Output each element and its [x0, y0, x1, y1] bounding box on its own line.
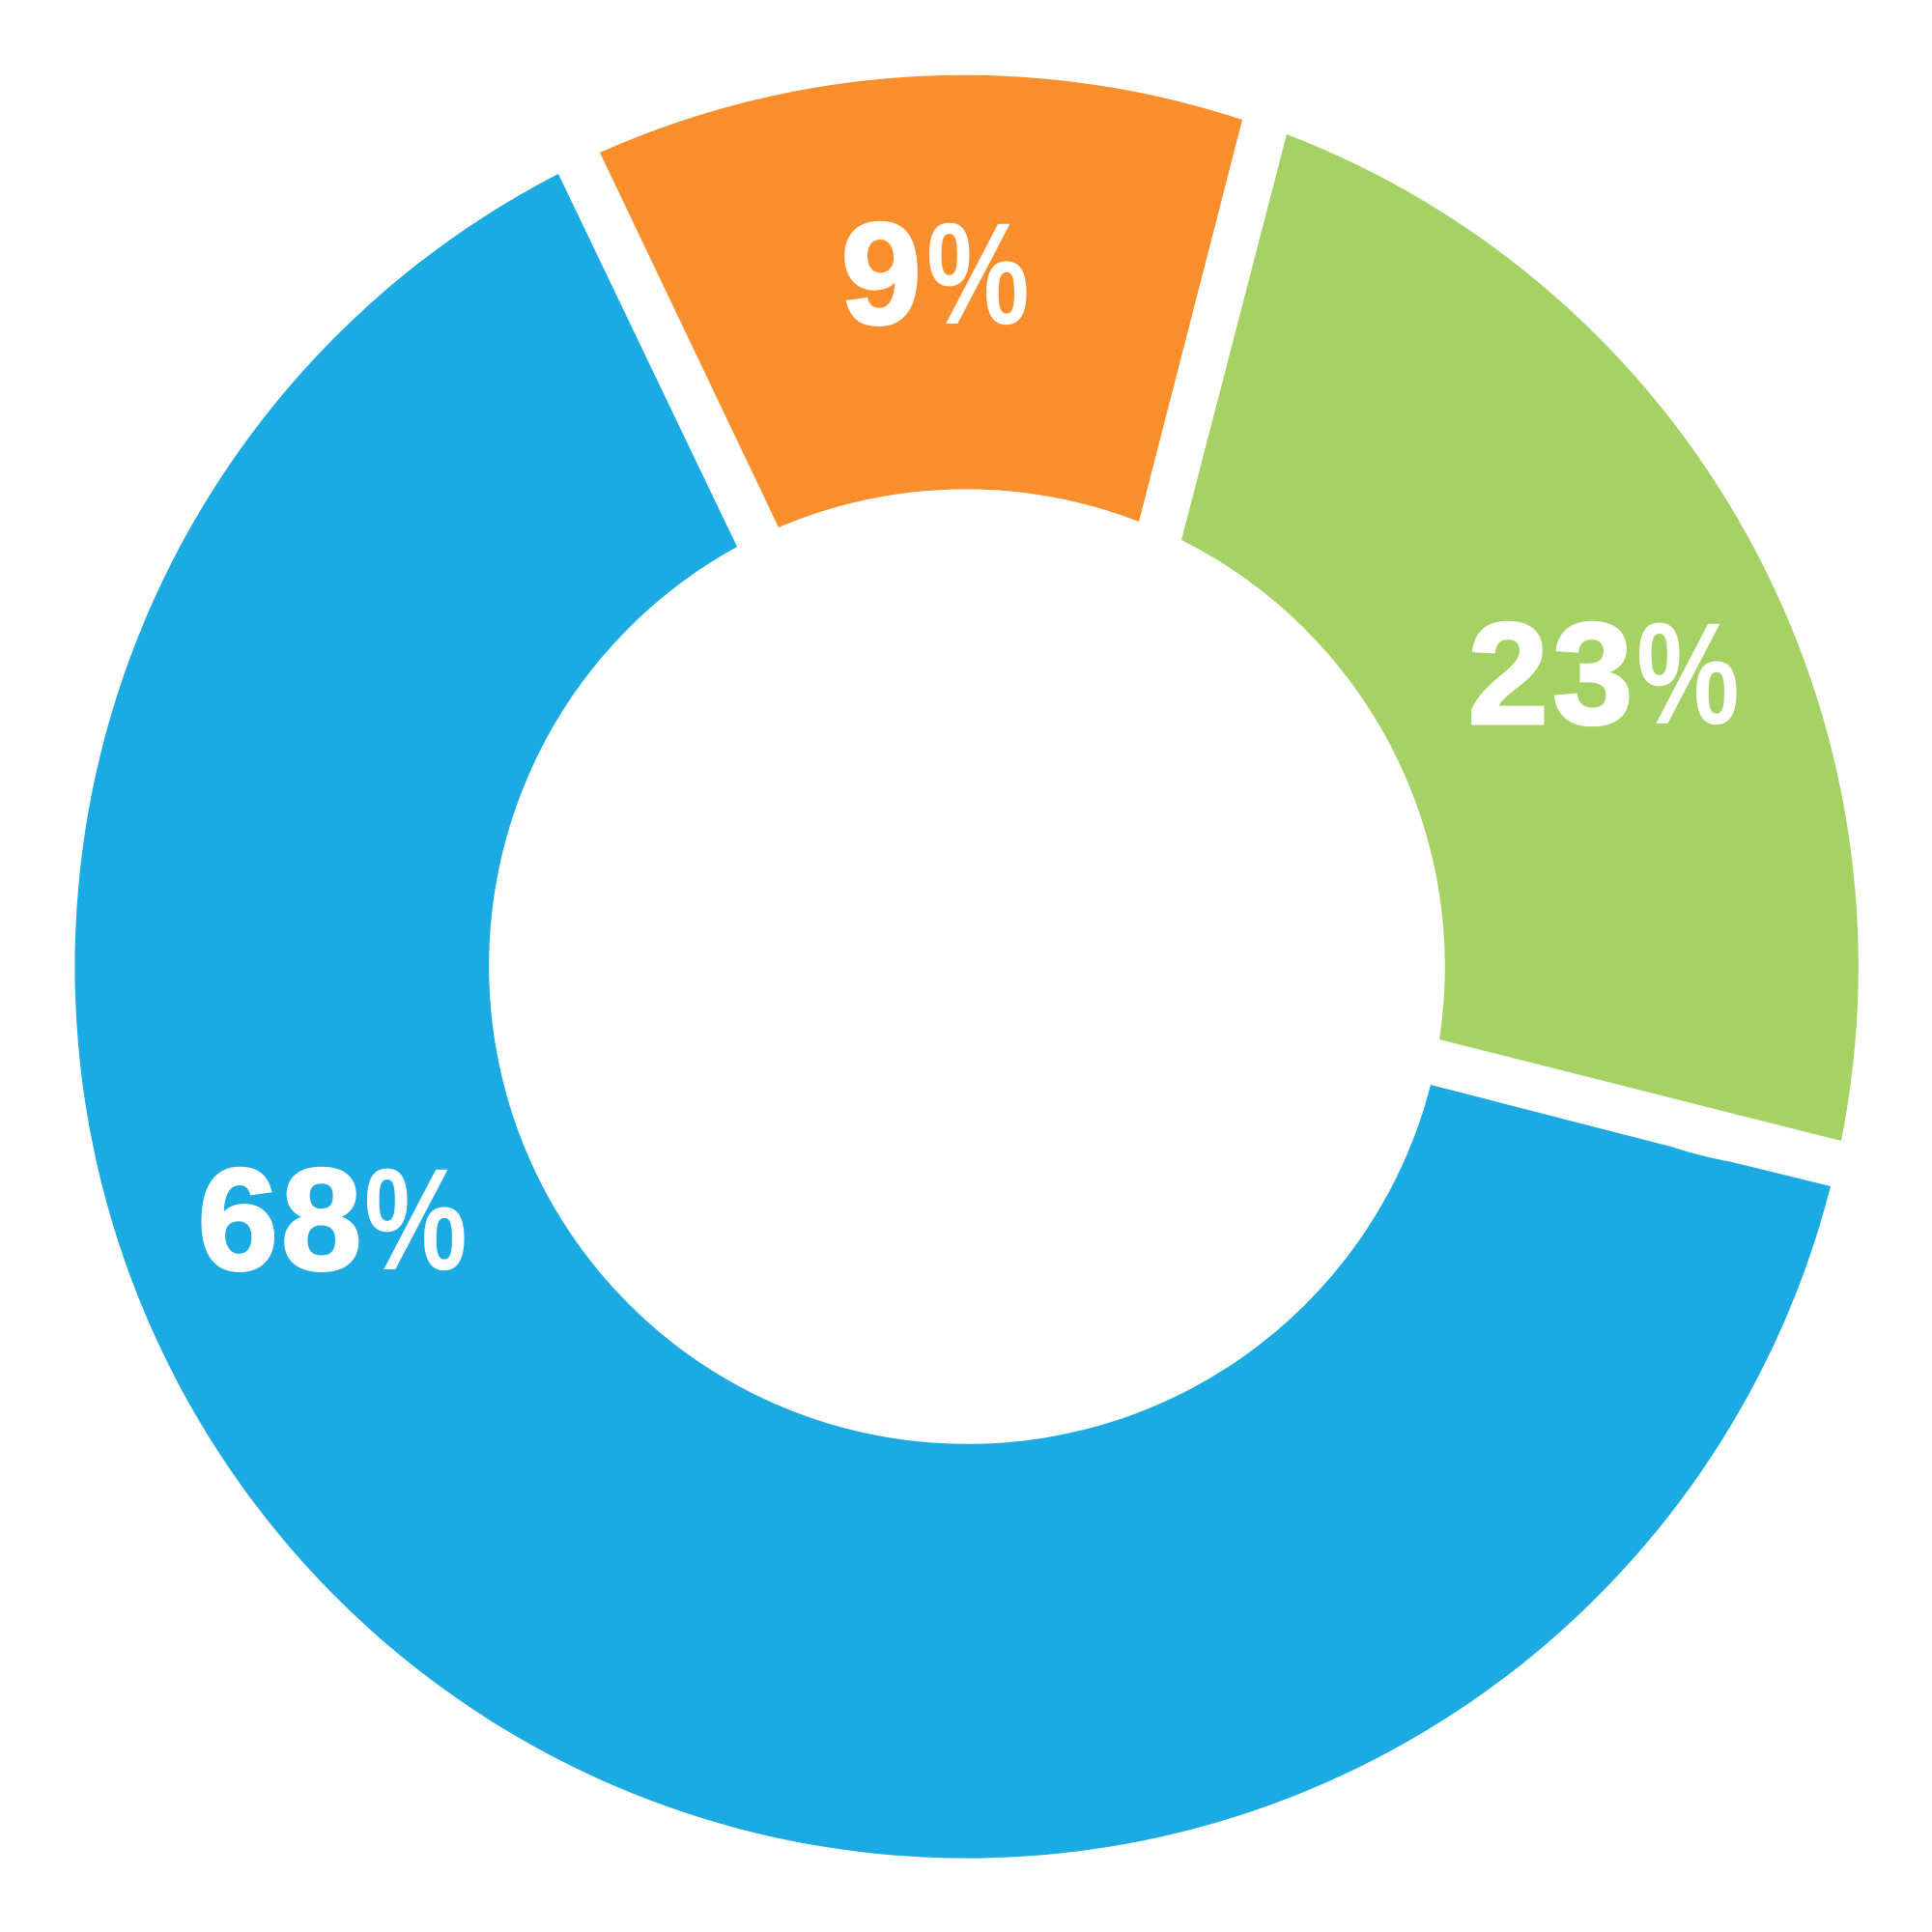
- segment: green 23%: [1181, 134, 1859, 1141]
- label: 68%: 68: [197, 1138, 361, 1300]
- label: 23%: 23: [1468, 592, 1633, 754]
- label: 9%: [840, 192, 1030, 355]
- label: 68%: [197, 1138, 468, 1300]
- segment: orange 9%: [600, 75, 1242, 527]
- segment: blue 68%: [74, 174, 1831, 1859]
- label: 9%: %: [926, 192, 1030, 355]
- label: 68%: %: [364, 1138, 468, 1300]
- label: 9%: 9: [840, 192, 922, 355]
- label: 23%: [1468, 592, 1740, 754]
- label: 23%: %: [1636, 592, 1740, 754]
